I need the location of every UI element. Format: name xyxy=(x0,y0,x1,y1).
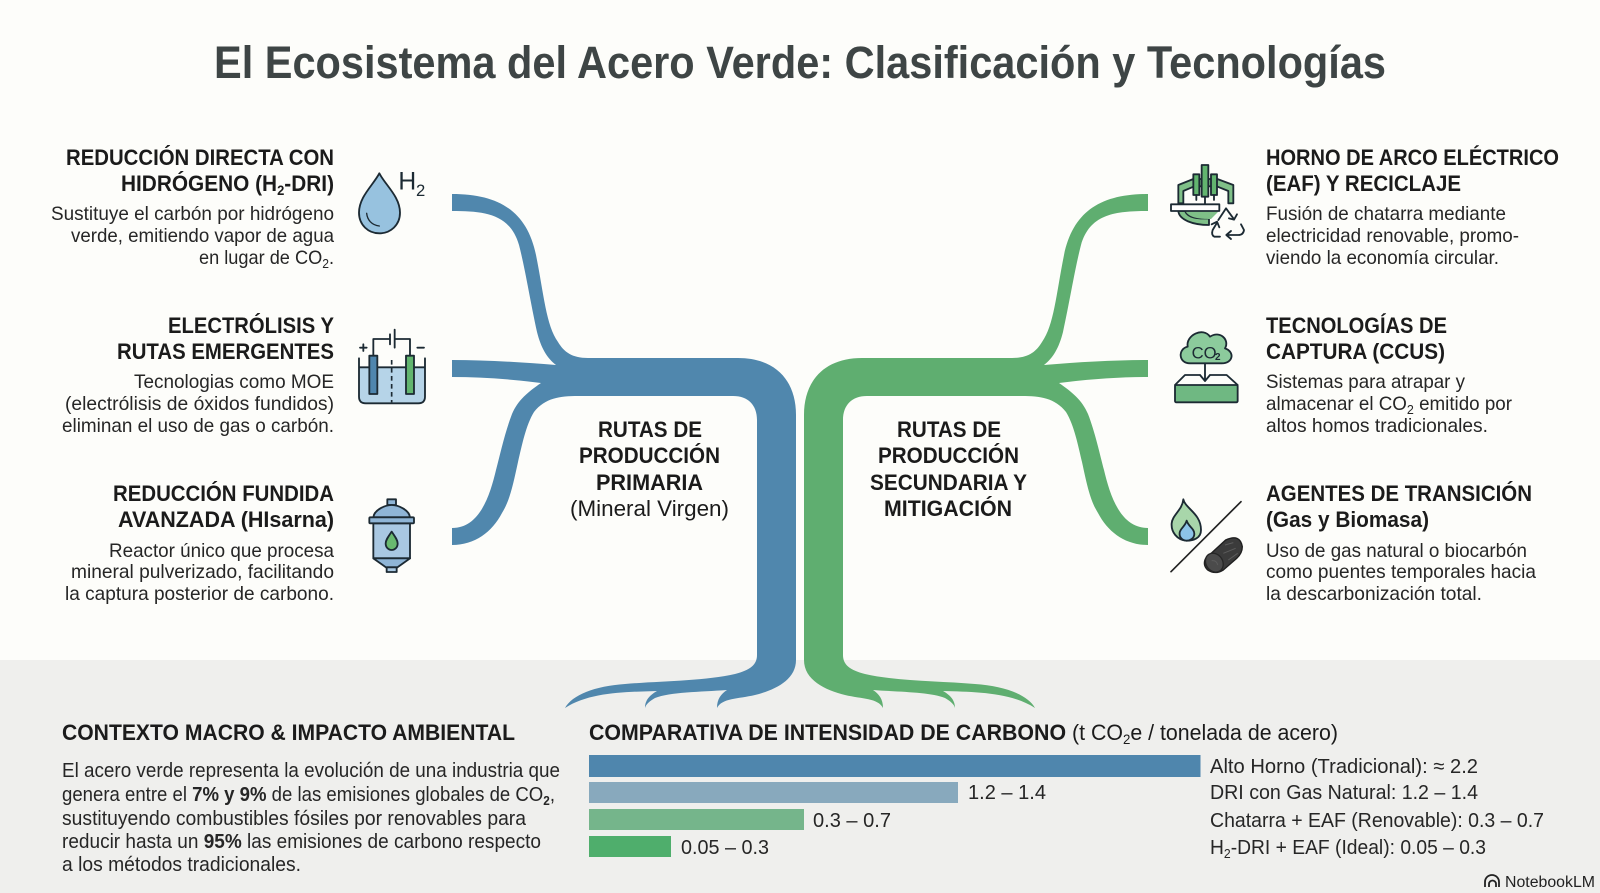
chart legend: H xyxy=(1210,836,1225,859)
text block: CCUS: almacenar el CO xyxy=(1266,393,1412,415)
bar value labels xyxy=(681,781,1046,859)
bar: Alto Horno xyxy=(589,755,1200,777)
text block: transition agents: Uso de gas natural o biocarbón xyxy=(1266,540,1527,562)
center label: primary routes: PRODUCCIÓN xyxy=(579,443,720,468)
bar: Chatarra + EAF xyxy=(589,809,804,830)
chart legend xyxy=(1210,755,1544,861)
text block: H2-DRI: HIDRÓGENO (H xyxy=(121,171,290,196)
center label: secondary routes: MITIGACIÓN xyxy=(884,496,1012,521)
text block: EAF: HORNO DE ARCO ELÉCTRICO xyxy=(1266,145,1559,170)
text block: EAF xyxy=(1266,145,1559,269)
text block: electrolysis: Tecnologias como MOE xyxy=(134,371,334,393)
panel: macro context: 2 xyxy=(543,793,550,808)
text block: HIsarna: REDUCCIÓN FUNDIDA xyxy=(113,481,334,506)
panel: carbon intensity chart xyxy=(589,720,1544,861)
icon: gas flame and biomass log xyxy=(1171,499,1242,576)
center label: secondary routes xyxy=(870,417,1027,521)
text block: EAF: Fusión de chatarra mediante xyxy=(1266,203,1506,225)
text block: H2-DRI: -DRI) xyxy=(284,171,334,196)
text block: HIsarna: AVANZADA (HIsarna) xyxy=(118,507,334,532)
text block: transition agents xyxy=(1266,481,1536,605)
center label: secondary routes: RUTAS DE xyxy=(897,417,1001,442)
text block: H2-DRI: Sustituye el carbón por hidrógeno xyxy=(51,203,334,225)
text block: H2-DRI: en lugar de CO xyxy=(199,247,331,269)
panel: macro context: sustituyendo combustibles fósiles por renovables para xyxy=(62,807,527,830)
center label: primary routes: RUTAS DE xyxy=(598,417,702,442)
text block: HIsarna: mineral pulverizado, facilitando xyxy=(71,561,334,583)
center label: primary routes xyxy=(570,417,729,521)
text block: HIsarna: Reactor único que procesa xyxy=(109,540,334,562)
icon: electric arc furnace and recycling xyxy=(1171,165,1247,241)
panel: macro context: , xyxy=(550,783,555,806)
chart legend: DRI con Gas Natural: 1.2 – 1.4 xyxy=(1210,781,1478,804)
icon: CO2 capture cloud and storage: 2 xyxy=(1215,352,1221,363)
text block: EAF: electricidad renovable, promo- xyxy=(1266,225,1519,247)
text block: H2-DRI: 2 xyxy=(277,182,284,198)
panel: macro context xyxy=(62,720,560,876)
panel: macro context: CONTEXTO MACRO & IMPACTO AMBIENTAL xyxy=(62,720,515,745)
panel: macro context: reducir hasta un 95% las emisiones de carbono respecto xyxy=(62,830,541,853)
chart legend: -DRI + EAF (Ideal): 0.05 – 0.3 xyxy=(1231,836,1486,859)
text block: transition agents: AGENTES DE TRANSICIÓN xyxy=(1266,481,1532,506)
title: El Ecosistema del Acero Verde: Clasificación y Tecnologías xyxy=(214,37,1386,88)
icon: CO2 capture cloud and storage: CO xyxy=(1192,343,1217,362)
text block: electrolysis: RUTAS EMERGENTES xyxy=(117,339,334,364)
text block: EAF: viendo la economía circular. xyxy=(1266,247,1499,269)
icon: hydrogen drop: H xyxy=(398,168,416,195)
chart legend: Chatarra + EAF (Renovable): 0.3 – 0.7 xyxy=(1210,809,1544,832)
text block: transition agents: la descarbonización total. xyxy=(1266,583,1482,605)
icon: CO2 capture cloud and storage xyxy=(1175,332,1238,402)
green tree: secondary routes and mitigation xyxy=(804,194,1148,708)
bar value labels: 1.2 – 1.4 xyxy=(968,781,1046,804)
text block: CCUS: 2 xyxy=(1407,402,1414,417)
text block: H2-DRI: REDUCCIÓN DIRECTA CON xyxy=(66,145,334,170)
bar value labels: 0.3 – 0.7 xyxy=(813,809,891,832)
center label: primary routes: (Mineral Virgen) xyxy=(570,496,729,521)
text block: CCUS: Sistemas para atrapar y xyxy=(1266,371,1465,393)
text block: EAF: (EAF) Y RECICLAJE xyxy=(1266,171,1461,196)
text block: electrolysis: (electrólisis de óxidos fundidos) xyxy=(65,393,334,415)
center label: secondary routes: PRODUCCIÓN xyxy=(878,443,1019,468)
text block: H2-DRI: 2 xyxy=(322,256,329,271)
text block: CCUS: CAPTURA (CCUS) xyxy=(1266,339,1445,364)
text block: transition agents: como puentes temporales hacia xyxy=(1266,561,1536,583)
text block: electrolysis xyxy=(62,313,334,437)
text block: HIsarna: la captura posterior de carbono. xyxy=(65,583,334,605)
chart legend: 2 xyxy=(1224,846,1231,861)
bar value labels: 0.05 – 0.3 xyxy=(681,836,769,859)
chart legend: Alto Horno (Tradicional): ≈ 2.2 xyxy=(1210,755,1478,778)
icon: electrolysis cell xyxy=(359,330,425,403)
chart heading: COMPARATIVA DE INTENSIDAD DE CARBONO (t CO xyxy=(589,720,1126,745)
chart heading: 2 xyxy=(1123,731,1131,747)
text block: H2-DRI: verde, emitiendo vapor de agua xyxy=(71,225,334,247)
text block: electrolysis: eliminan el uso de gas o carbón. xyxy=(62,415,334,437)
text block: CCUS: altos homos tradicionales. xyxy=(1266,415,1488,437)
panel: macro context: El acero verde representa la evolución de una industria que xyxy=(62,759,560,782)
panel: macro context: genera entre el 7% y 9% de las emisiones globales de CO xyxy=(62,783,572,806)
blue tree: primary routes xyxy=(452,194,796,708)
NotebookLM badge: NotebookLM xyxy=(1505,874,1595,891)
text block: HIsarna xyxy=(65,481,334,605)
center label: primary routes: PRIMARIA xyxy=(596,470,703,495)
icon: reactor xyxy=(369,499,414,572)
chart heading: e / tonelada de acero) xyxy=(1130,720,1338,745)
icon: hydrogen drop: 2 xyxy=(416,181,425,200)
bar: DRI con Gas Natural xyxy=(589,782,958,803)
text block: transition agents: (Gas y Biomasa) xyxy=(1266,507,1429,532)
text block: H2-DRI xyxy=(51,145,334,271)
center label: secondary routes: SECUNDARIA Y xyxy=(870,470,1027,495)
bar: H2-DRI + EAF xyxy=(589,836,671,857)
bottom context band xyxy=(0,660,1600,893)
panel: macro context: a los métodos tradicionales. xyxy=(62,853,301,876)
icon: hydrogen drop xyxy=(359,168,425,233)
text block: H2-DRI: . xyxy=(329,247,334,269)
text block: CCUS: TECNOLOGÍAS DE xyxy=(1266,313,1447,338)
text block: CCUS: emitido por xyxy=(1414,393,1512,415)
text block: electrolysis: ELECTRÓLISIS Y xyxy=(168,313,334,338)
text block: CCUS xyxy=(1266,313,1512,437)
